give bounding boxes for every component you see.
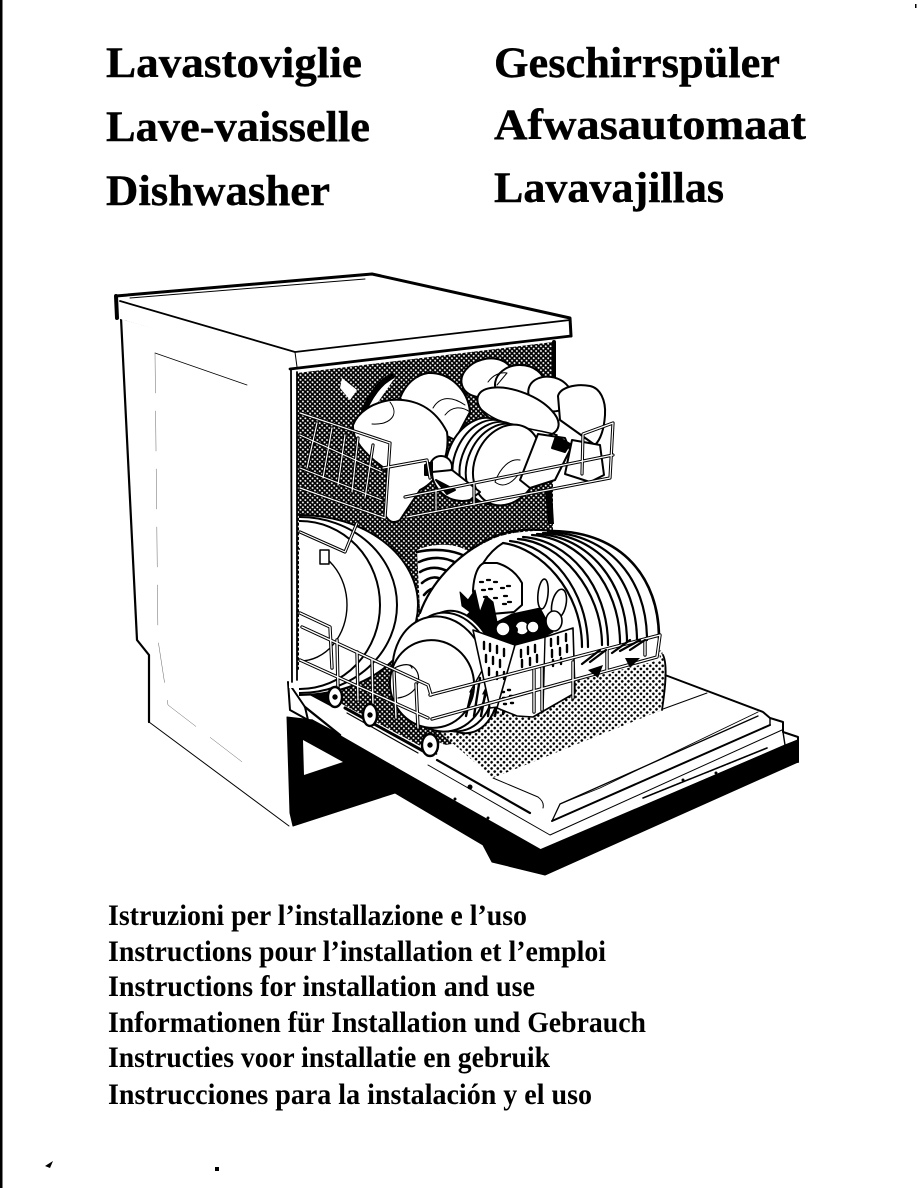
lower rack: left plates	[299, 514, 419, 696]
open door	[288, 668, 798, 850]
door side column	[289, 368, 297, 688]
upper rack dishes	[340, 353, 605, 522]
cutlery	[460, 563, 569, 650]
title: product names: Lave-vaisselle	[106, 104, 370, 151]
lower rack: large plates	[418, 530, 660, 715]
upper rack wires	[300, 413, 613, 567]
instructions text: Istruzioni per l’installazione e l’uso	[108, 899, 527, 932]
instructions text: Informationen für Installation und Gebrauch	[108, 1006, 646, 1039]
page edge line	[0, 0, 2, 1188]
instructions text	[108, 899, 646, 1111]
title: product names: Geschirrspüler	[494, 40, 780, 87]
title: product names	[106, 40, 807, 215]
lower left stipple strip and shadow	[300, 672, 440, 755]
worktop	[116, 274, 571, 369]
title: product names: Afwasautomaat	[494, 102, 807, 149]
instructions text: Instructions for installation and use	[108, 970, 535, 1003]
title: product names: Lavavajillas	[494, 165, 724, 212]
title: product names: Lavastoviglie	[106, 40, 362, 87]
cutlery basket	[473, 628, 575, 717]
lower rack: front plates	[382, 603, 510, 741]
dotted door liner	[430, 650, 665, 778]
instructions text: Instructies voor installatie en gebruik	[108, 1041, 550, 1074]
interior right edge	[552, 342, 556, 378]
lower rack wires and wheels	[300, 613, 660, 756]
lower rack: striped stack behind	[417, 545, 475, 620]
instructions text: Instructions pour l’installation et l’emploi	[108, 935, 606, 968]
title: product names: Dishwasher	[106, 168, 330, 215]
cabinet side	[121, 318, 289, 826]
illustration: dishwasher with open door	[116, 274, 798, 875]
black plinth	[287, 717, 798, 875]
instructions text: Instrucciones para la instalación y el uso	[108, 1078, 592, 1111]
interior back wall	[297, 342, 665, 745]
